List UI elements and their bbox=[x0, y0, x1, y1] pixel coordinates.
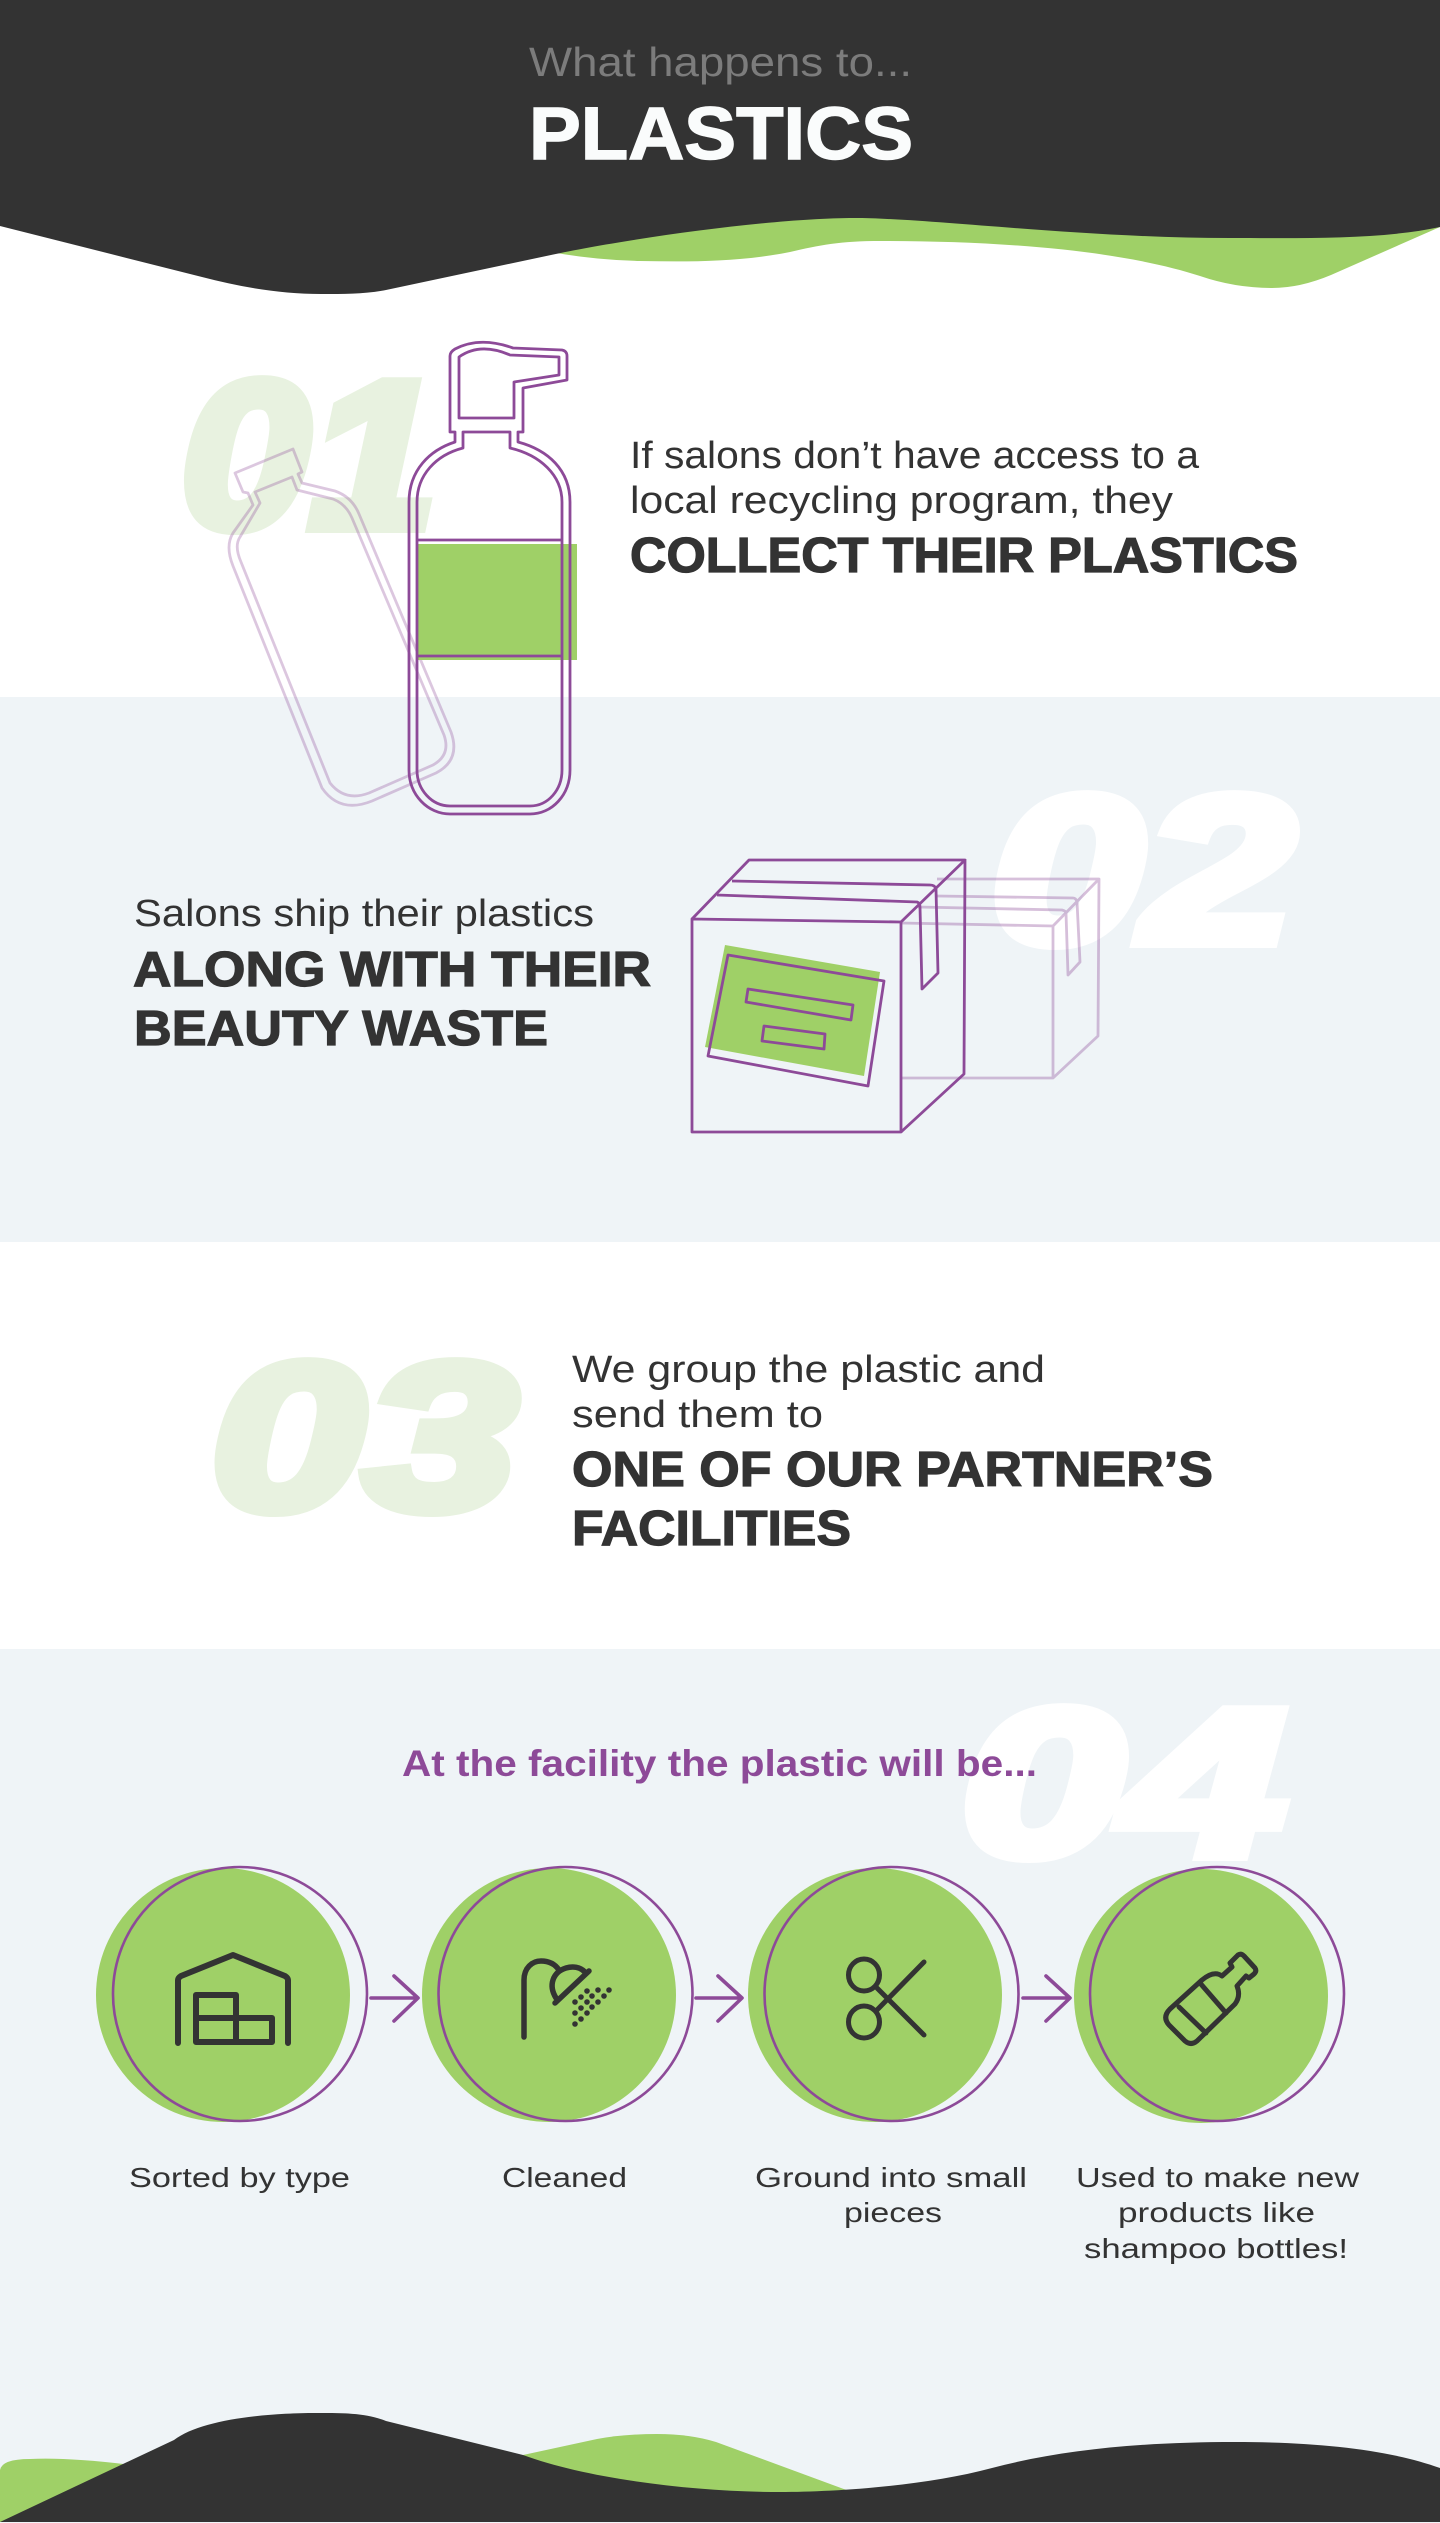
icon: faded box bbox=[901, 879, 1099, 1078]
label: Cleaned bbox=[502, 2162, 627, 2193]
step: ground into small pieces bbox=[748, 1867, 1027, 2228]
icon: shower bbox=[524, 1961, 612, 2037]
text block: step 2: Salons ship their plastics bbox=[134, 893, 594, 935]
text block: step 3: send them to bbox=[572, 1394, 823, 1436]
icon: scissors bbox=[848, 1959, 924, 2038]
number: 03: 03 bbox=[211, 1321, 517, 1554]
arrow 2 bbox=[696, 1976, 742, 2021]
step: cleaned bbox=[422, 1867, 692, 2193]
text block: step 3 bbox=[572, 1349, 1213, 1556]
label: Sorted by type bbox=[129, 2162, 350, 2193]
text block: step 1: COLLECT THEIR PLASTICS bbox=[630, 529, 1298, 583]
header wave: green layer bbox=[520, 200, 1440, 288]
text block: step 1: If salons don’t have access to a bbox=[630, 435, 1200, 477]
text block: step 2: ALONG WITH THEIR bbox=[133, 943, 651, 997]
icon: warehouse bbox=[178, 1955, 288, 2043]
label bbox=[755, 2162, 1027, 2228]
number: 04: 04 bbox=[961, 1667, 1286, 1900]
icon: faded tilted bottle bbox=[229, 449, 454, 805]
text block: step 1 bbox=[630, 435, 1298, 583]
band: section 4 background bbox=[0, 1649, 1440, 2523]
circle: green disc bbox=[96, 1868, 350, 2122]
number: 02: 02 bbox=[991, 754, 1295, 987]
label: Used to make new bbox=[1076, 2162, 1360, 2193]
arrow 3 bbox=[1023, 1976, 1070, 2021]
title: What happens to... bbox=[529, 39, 912, 85]
icon: shipping box bbox=[692, 859, 965, 1132]
arrow 1 bbox=[371, 1976, 418, 2021]
title: PLASTICS bbox=[529, 92, 913, 175]
label: products like bbox=[1118, 2197, 1315, 2228]
text block: step 1: local recycling program, they bbox=[630, 480, 1173, 522]
circle: green disc bbox=[1074, 1869, 1328, 2123]
band: section 2 background bbox=[0, 697, 1440, 1242]
circle: outline bbox=[113, 1867, 367, 2121]
footer wave: green layer bbox=[0, 2434, 860, 2522]
label: shampoo bottles! bbox=[1084, 2233, 1348, 2264]
label: Ground into small bbox=[755, 2162, 1027, 2193]
text block: step 2 bbox=[133, 893, 651, 1056]
label: pieces bbox=[844, 2197, 942, 2228]
icon: bottle bbox=[1166, 1954, 1256, 2044]
circle: outline bbox=[764, 1867, 1018, 2121]
number: 01: 01 bbox=[181, 339, 437, 572]
header wave: dark layer bbox=[0, 0, 1440, 294]
step: new products bbox=[1074, 1867, 1360, 2264]
circle: green disc bbox=[748, 1868, 1002, 2122]
footer wave: dark layer bbox=[0, 2413, 1440, 2522]
text block: step 3: We group the plastic and bbox=[572, 1349, 1045, 1391]
label bbox=[1076, 2162, 1360, 2264]
circle: outline bbox=[438, 1867, 692, 2121]
circle: outline bbox=[1090, 1867, 1344, 2121]
text block: step 3: FACILITIES bbox=[572, 1502, 851, 1556]
circle: green disc bbox=[422, 1868, 676, 2122]
step: sorted by type bbox=[96, 1867, 367, 2193]
icon: pump bottle bbox=[409, 342, 577, 814]
heading: at the facility: At the facility the plastic will be... bbox=[402, 1743, 1037, 1784]
text block: step 2: BEAUTY WASTE bbox=[134, 1002, 548, 1056]
text block: step 3: ONE OF OUR PARTNER’S bbox=[572, 1443, 1213, 1497]
title bbox=[529, 39, 913, 175]
